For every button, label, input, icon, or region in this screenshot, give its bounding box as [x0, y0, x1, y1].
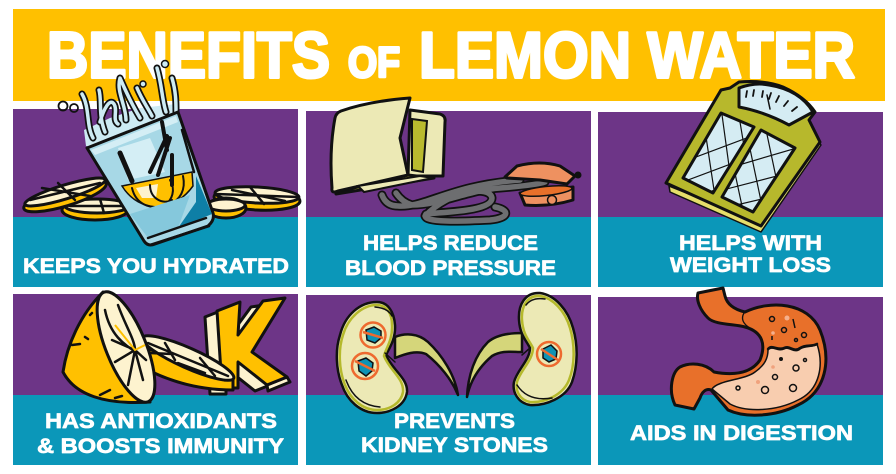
icon: bathroom scale [666, 82, 821, 232]
icon: stomach [671, 288, 826, 415]
label: helps with weight loss: WEIGHT LOSS [670, 254, 831, 277]
label: aids in digestion: AIDS IN DIGESTION [630, 422, 853, 445]
title banner [13, 9, 885, 101]
icon: lemon slices [21, 173, 301, 220]
panel: prevents kidney stones [306, 293, 591, 465]
label: helps reduce blood pressure: HELPS REDUCE [363, 232, 538, 255]
panel: has antioxidants and boosts immunity [13, 285, 298, 465]
label: has antioxidants and boosts immunity: & BOOSTS IMMUNITY [37, 435, 284, 458]
icon: lemon half [63, 285, 167, 409]
label: prevents kidney stones: KIDNEY STONES [361, 434, 548, 457]
icon: lemon slice [138, 329, 238, 390]
label: has antioxidants and boosts immunity [37, 410, 284, 458]
label: prevents kidney stones: PREVENTS [394, 410, 515, 433]
label: helps with weight loss [670, 232, 831, 277]
title text: BENEFITS [47, 18, 330, 92]
icon: right kidney [467, 293, 577, 405]
panel: keeps you hydrated [13, 60, 301, 287]
panel: helps with weight loss [598, 82, 883, 287]
label: prevents kidney stones [361, 410, 548, 457]
title text: OF [348, 39, 400, 87]
icon: blood pressure cuff and tube [331, 98, 582, 221]
icon: vitamin K letter [205, 298, 290, 394]
panel: helps reduce blood pressure [306, 98, 591, 287]
label: helps reduce blood pressure: BLOOD PRESSURE [345, 257, 556, 280]
label: helps reduce blood pressure [345, 232, 556, 280]
title text [47, 18, 855, 92]
label: has antioxidants and boosts immunity: HAS ANTIOXIDANTS [45, 410, 277, 433]
panel: aids in digestion [598, 288, 883, 465]
icon: left kidney [337, 302, 458, 413]
icon: glass of water with splash [58, 60, 213, 245]
label: keeps you hydrated: KEEPS YOU HYDRATED [23, 255, 289, 278]
label: helps with weight loss: HELPS WITH [679, 232, 822, 255]
title text: LEMON WATER [419, 18, 855, 92]
